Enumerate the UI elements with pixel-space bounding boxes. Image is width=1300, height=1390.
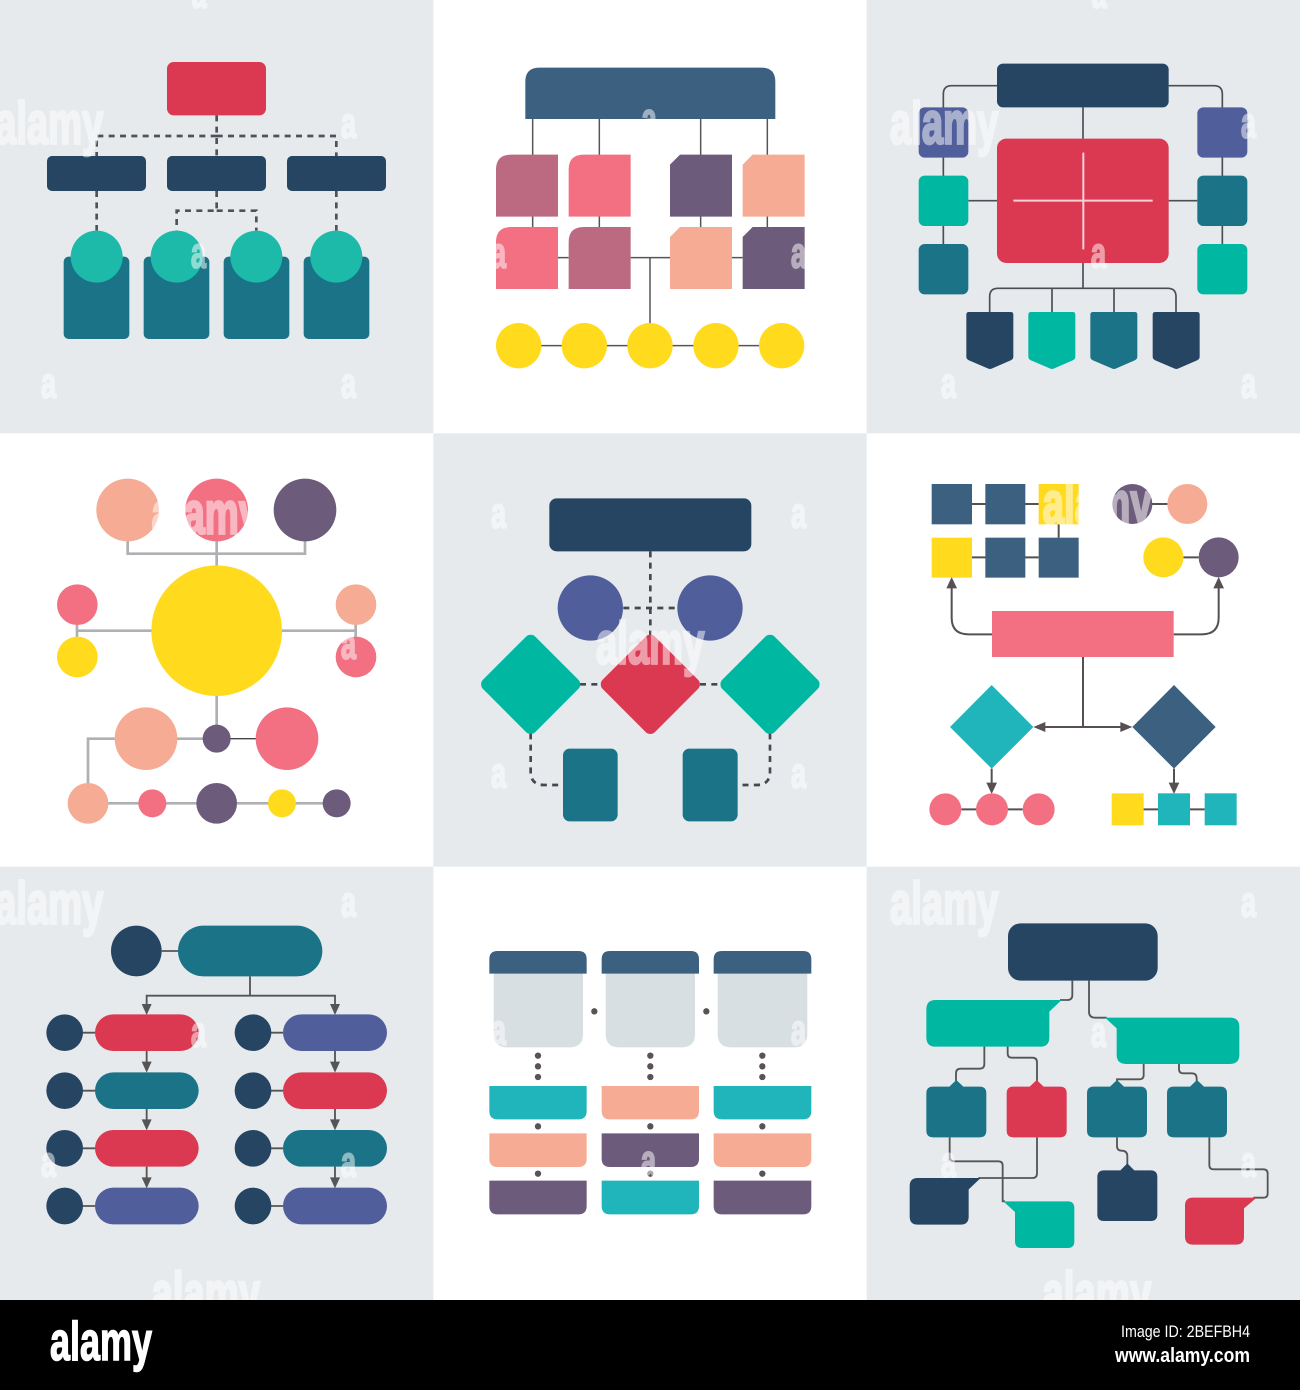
watermarks: a xyxy=(1091,230,1107,278)
website: www.alamy.com xyxy=(1114,1345,1250,1367)
right capsules xyxy=(283,1014,387,1224)
watermarks: a xyxy=(41,360,57,408)
watermarks: alamy xyxy=(152,479,260,546)
panel: central red block with side squares xyxy=(867,0,1300,435)
diamonds xyxy=(950,685,1216,769)
indigo circles xyxy=(558,575,743,641)
watermarks: a xyxy=(341,99,357,147)
column 2 bars xyxy=(602,1086,699,1214)
teal boxes xyxy=(563,749,738,821)
watermarks: a xyxy=(791,490,807,538)
column 3 bars xyxy=(714,1086,811,1214)
yellow circles row xyxy=(496,323,804,368)
panel: header with corner-cut tiles xyxy=(433,0,867,435)
watermarks: a xyxy=(341,360,357,408)
watermarks: alamy xyxy=(152,1259,260,1326)
left squares xyxy=(919,107,968,294)
arrowheads xyxy=(142,1004,340,1188)
connectors xyxy=(943,86,1222,312)
left capsules xyxy=(95,1014,199,1224)
central yellow circle xyxy=(151,565,282,696)
tile connectors xyxy=(519,119,782,346)
chamfered tiles right xyxy=(670,155,805,289)
watermarks: alamy xyxy=(890,89,998,156)
shield shapes xyxy=(966,312,1200,369)
watermarks: a xyxy=(341,620,357,668)
watermarks: a xyxy=(491,230,507,278)
top left squares xyxy=(932,484,1079,578)
watermarks: alamy xyxy=(1043,469,1152,536)
watermarks: a xyxy=(191,230,207,278)
pink bar xyxy=(992,611,1174,657)
watermarks: a xyxy=(1091,1009,1107,1057)
watermarks xyxy=(0,869,357,1326)
watermarks: a xyxy=(191,1009,207,1057)
panel: circle network xyxy=(0,433,435,869)
watermarks: a xyxy=(41,1139,57,1187)
watermarks: a xyxy=(791,230,807,278)
connectors xyxy=(83,951,335,1206)
panel: three column cards xyxy=(433,867,869,1300)
green callouts xyxy=(926,1000,1239,1064)
top navy box xyxy=(549,498,751,551)
watermarks: alamy xyxy=(596,609,704,676)
teal cards with circles xyxy=(64,231,369,339)
watermarks xyxy=(491,95,807,278)
connectors xyxy=(952,504,1219,809)
arrowheads xyxy=(946,577,1224,794)
panel: hierarchy with dashed connectors xyxy=(0,0,435,435)
top circle and capsule xyxy=(111,926,322,976)
rounded tiles left xyxy=(496,155,631,289)
watermarks: a xyxy=(941,1139,957,1187)
top navy box xyxy=(1008,923,1158,981)
watermarks: a xyxy=(341,879,357,927)
watermarks: a xyxy=(641,1137,657,1185)
watermarks xyxy=(0,0,357,408)
header bar xyxy=(525,68,775,119)
connector dots xyxy=(535,1008,765,1177)
watermarks: a xyxy=(341,1139,357,1187)
watermarks: a xyxy=(791,1006,807,1054)
third row callouts xyxy=(910,1163,1257,1248)
watermarks: a xyxy=(1241,1139,1257,1187)
squares row xyxy=(1112,793,1237,825)
image id: Image ID: 2BEFBH4 xyxy=(1121,1322,1250,1341)
watermarks xyxy=(890,0,1257,408)
watermarks: a xyxy=(491,1006,507,1054)
card bodies xyxy=(494,973,807,1047)
panel: capsule flow columns xyxy=(0,867,435,1326)
watermarks xyxy=(491,1006,807,1185)
watermarks: alamy xyxy=(1042,1259,1151,1326)
diamonds xyxy=(478,632,822,737)
watermarks: a xyxy=(491,490,507,538)
top red box xyxy=(167,62,266,115)
panel: squares circles and arrows xyxy=(867,433,1300,869)
grey connectors xyxy=(77,540,356,803)
watermarks: a xyxy=(791,750,807,798)
card headers xyxy=(489,951,811,974)
dashed connectors xyxy=(531,551,770,785)
pink circles row xyxy=(929,793,1055,825)
dashed connectors xyxy=(97,115,336,231)
watermarks: a xyxy=(642,95,657,143)
watermarks: alamy xyxy=(0,869,103,936)
watermarks xyxy=(152,479,357,668)
footer bar xyxy=(0,1300,1300,1390)
panel: decision diamonds xyxy=(433,433,869,869)
central red block with cross xyxy=(997,139,1169,263)
watermarks xyxy=(890,869,1257,1326)
column 1 bars xyxy=(489,1086,587,1214)
panel: speech-bubble tree xyxy=(867,867,1300,1326)
navy boxes row xyxy=(47,156,386,191)
watermarks: a xyxy=(941,360,957,408)
watermarks: a xyxy=(491,750,507,798)
navy circles xyxy=(46,1014,271,1224)
top circles xyxy=(96,479,336,541)
right squares xyxy=(1197,107,1247,294)
top navy box xyxy=(997,64,1169,107)
bottom row circles xyxy=(68,783,351,824)
middle row circles xyxy=(115,707,318,770)
footer logo: alamy xyxy=(50,1310,152,1372)
watermarks: a xyxy=(1241,360,1257,408)
watermarks: alamy xyxy=(890,869,998,936)
second row boxes with pointers xyxy=(926,1080,1227,1137)
watermarks: alamy xyxy=(0,89,103,156)
top right circles xyxy=(1112,484,1239,577)
connectors xyxy=(950,981,1268,1201)
watermarks: a xyxy=(1241,99,1257,147)
watermarks xyxy=(491,490,807,798)
watermarks: a xyxy=(1241,879,1257,927)
side circles xyxy=(57,584,376,677)
